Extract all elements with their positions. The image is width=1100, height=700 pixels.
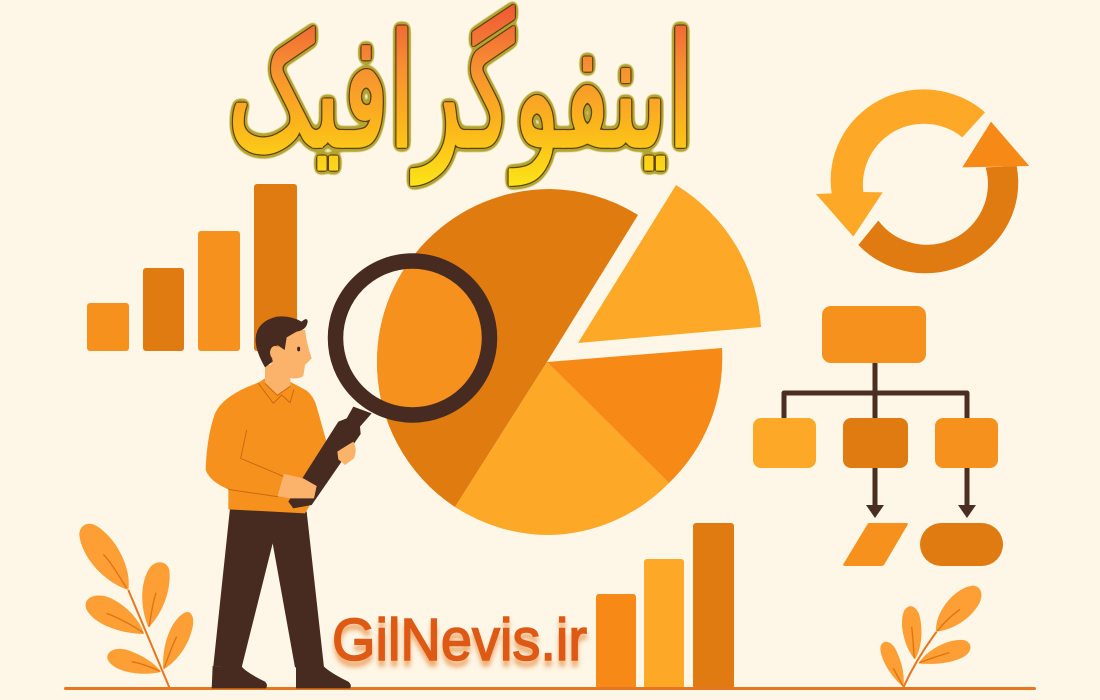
ear (270, 346, 280, 359)
hair (256, 316, 308, 367)
ground line (64, 687, 1036, 690)
box: right (935, 418, 998, 468)
magnifier ring (336, 261, 490, 415)
arrow: dark orange (858, 166, 1018, 273)
sweater (206, 378, 333, 513)
arrow: yellow (816, 89, 985, 237)
leaf (880, 642, 904, 687)
neck (265, 365, 291, 395)
lens highlight on pie (377, 268, 482, 408)
parallelogram (843, 523, 908, 566)
icon: cycle arrows (816, 89, 1029, 273)
leaf (107, 649, 161, 674)
title: اینفوگرافیک (228, 2, 694, 184)
leaf (902, 606, 921, 659)
bar chart: lower centre (596, 523, 734, 689)
icon: plant left (79, 524, 193, 687)
bar chart: upper left (87, 184, 297, 351)
box: middle (843, 418, 908, 468)
pill (920, 523, 1003, 566)
leaf (79, 524, 129, 590)
arrow: right down (958, 468, 976, 518)
pants (213, 508, 324, 667)
hand: lower (277, 474, 317, 498)
leaf (936, 586, 981, 632)
person with magnifier (206, 316, 372, 688)
face (270, 330, 312, 379)
box: top (822, 306, 926, 363)
leaf (163, 612, 193, 669)
pie chart (377, 185, 761, 535)
box: left (753, 418, 816, 468)
pie slice: lower yellow (455, 362, 669, 535)
leaf (918, 640, 970, 664)
pie slice: exploded yellow wedge (578, 185, 761, 343)
icon: plant right (880, 586, 981, 687)
handle (288, 407, 372, 508)
connector lines (784, 363, 967, 468)
pie slice: dark left half (377, 189, 638, 507)
eye (297, 347, 300, 351)
flowchart (753, 306, 1003, 566)
shoes (212, 666, 351, 688)
arrow: middle down (866, 468, 884, 518)
website label: GilNevis.ir (332, 607, 587, 673)
leaf (86, 596, 144, 634)
hand: upper (337, 442, 356, 465)
leaf (142, 562, 170, 627)
pie slice: orange right (547, 348, 722, 483)
